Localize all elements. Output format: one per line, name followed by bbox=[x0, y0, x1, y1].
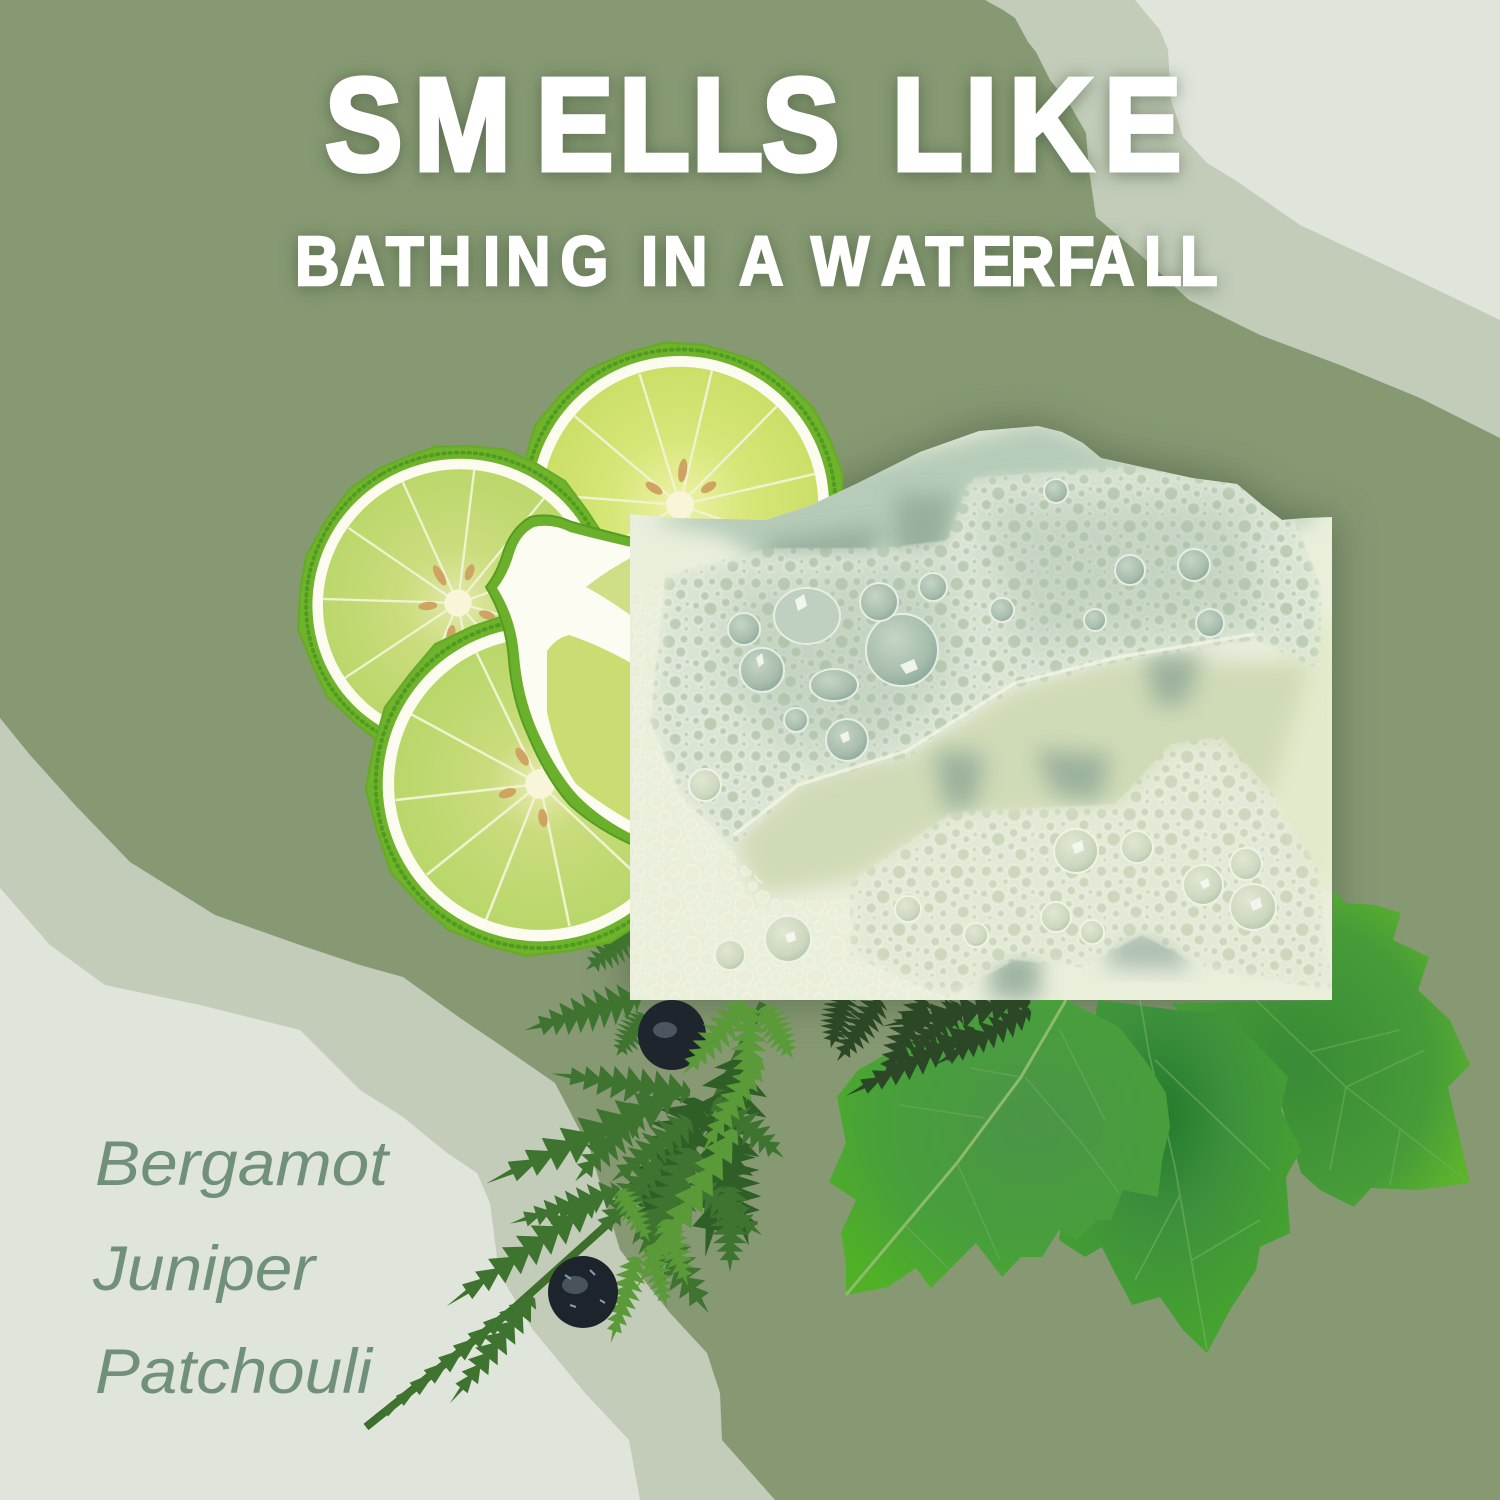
slice: bottom bbox=[303, 548, 777, 1021]
fronds: mid green bbox=[358, 915, 796, 1437]
leaf: centre bbox=[1059, 1000, 1301, 1353]
foam shading: deeper tone around large bubbles bbox=[730, 500, 1260, 760]
bubble highlights bbox=[756, 594, 1262, 943]
soap inclusion: bottom blue bbox=[1105, 930, 1190, 970]
torn paper band: top right light tone bbox=[1135, 0, 1500, 320]
leaf: right bbox=[1170, 890, 1470, 1207]
juniper berry: upper bbox=[638, 1000, 706, 1070]
subtitle: bathing in a waterfall: BATHING IN A WATERFALL bbox=[295, 221, 1218, 300]
torn paper band: bottom left light tone bbox=[0, 888, 640, 1500]
foam: upper bubbles bbox=[650, 466, 1322, 850]
soap ridge line bbox=[734, 634, 1255, 835]
torn paper band: top right mid tone bbox=[985, 0, 1500, 438]
dark sprig over left leaf bbox=[812, 983, 1038, 1110]
slice: centre, mostly pith bbox=[486, 515, 700, 860]
soap dark inclusions bbox=[755, 495, 1203, 1000]
scent: juniper: Juniper bbox=[92, 1234, 318, 1304]
fronds: bright bbox=[596, 991, 809, 1348]
scent list bbox=[92, 1129, 391, 1407]
title: smells like: SMELLS LIKE bbox=[325, 51, 1181, 199]
bergamot slices bbox=[241, 322, 864, 1021]
scent: patchouli: Patchouli bbox=[95, 1337, 374, 1407]
slice: left bbox=[241, 388, 675, 819]
torn paper band: bottom left mid tone bbox=[0, 718, 775, 1500]
soap tint: right edge bbox=[1272, 620, 1332, 888]
large bubbles: upper bbox=[728, 479, 1224, 761]
juniper berry: lower bbox=[548, 1256, 618, 1328]
upper flesh bbox=[586, 553, 640, 622]
large bubbles: lower bbox=[689, 769, 1276, 970]
leaf: left bbox=[829, 1000, 1170, 1295]
soap bar bbox=[630, 420, 1340, 1000]
lower flesh bbox=[547, 635, 640, 826]
fronds: deep shade cluster bbox=[600, 1054, 778, 1263]
soap tint: cream band bbox=[734, 660, 1309, 895]
juniper sprig bbox=[358, 915, 809, 1437]
scent: bergamot: Bergamot bbox=[95, 1129, 391, 1199]
main stem bbox=[366, 1003, 763, 1427]
soap shadow bbox=[630, 426, 1332, 1000]
foam: faint left and bottom bubbles bbox=[632, 580, 960, 998]
patchouli leaves bbox=[812, 890, 1470, 1353]
slice: top bbox=[496, 322, 864, 689]
soap tint: mint ridge along top bbox=[650, 420, 1320, 560]
foam: lower bubbles bbox=[850, 736, 1332, 998]
